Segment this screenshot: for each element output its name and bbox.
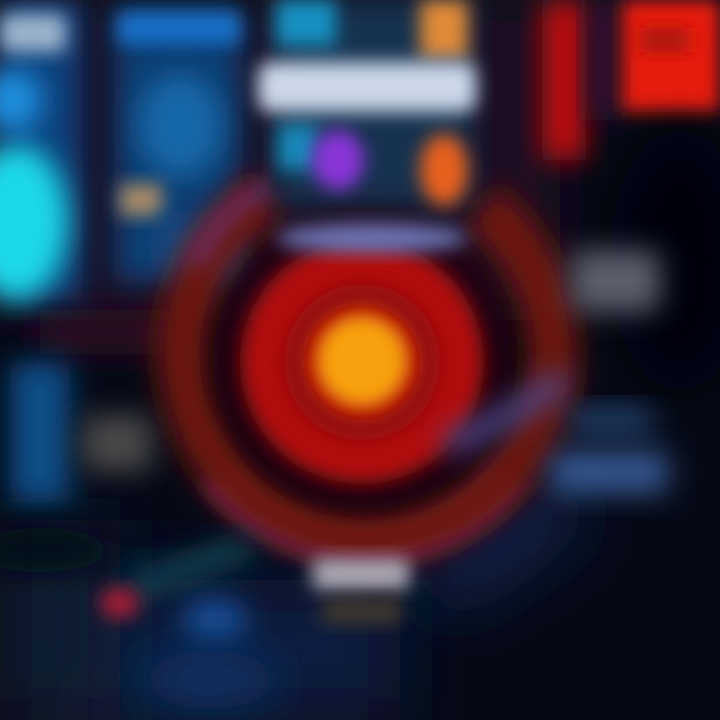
icon: purple triangle bbox=[312, 130, 364, 190]
pink upper-left arc bbox=[195, 185, 272, 265]
callout: bottom label bbox=[312, 558, 410, 624]
text block: left label bbox=[10, 362, 152, 502]
outer purple ring bbox=[215, 475, 510, 548]
inner dark ring bbox=[294, 294, 430, 430]
panel: centre screen bbox=[258, 0, 476, 253]
icon: orange block bbox=[420, 134, 468, 206]
heading: left screen label bbox=[0, 14, 66, 52]
chart: concentric target bbox=[183, 185, 565, 548]
panel: bottom controls bbox=[0, 528, 280, 708]
yellow core bbox=[315, 314, 409, 408]
lavender band bbox=[276, 223, 468, 253]
lavender lower-right arc bbox=[445, 378, 565, 445]
icon: red button bbox=[100, 587, 140, 619]
dark gap ring bbox=[225, 225, 499, 499]
text block: right labels bbox=[550, 250, 668, 494]
panel: left screen bbox=[0, 0, 82, 300]
panel: left-centre screen bbox=[114, 8, 242, 283]
heading: centre title bbox=[258, 62, 476, 112]
panel: right dark figure bbox=[610, 130, 720, 390]
panel: right red screen bbox=[542, 0, 720, 160]
dark red ring bbox=[183, 195, 553, 537]
red disc bbox=[240, 240, 484, 484]
